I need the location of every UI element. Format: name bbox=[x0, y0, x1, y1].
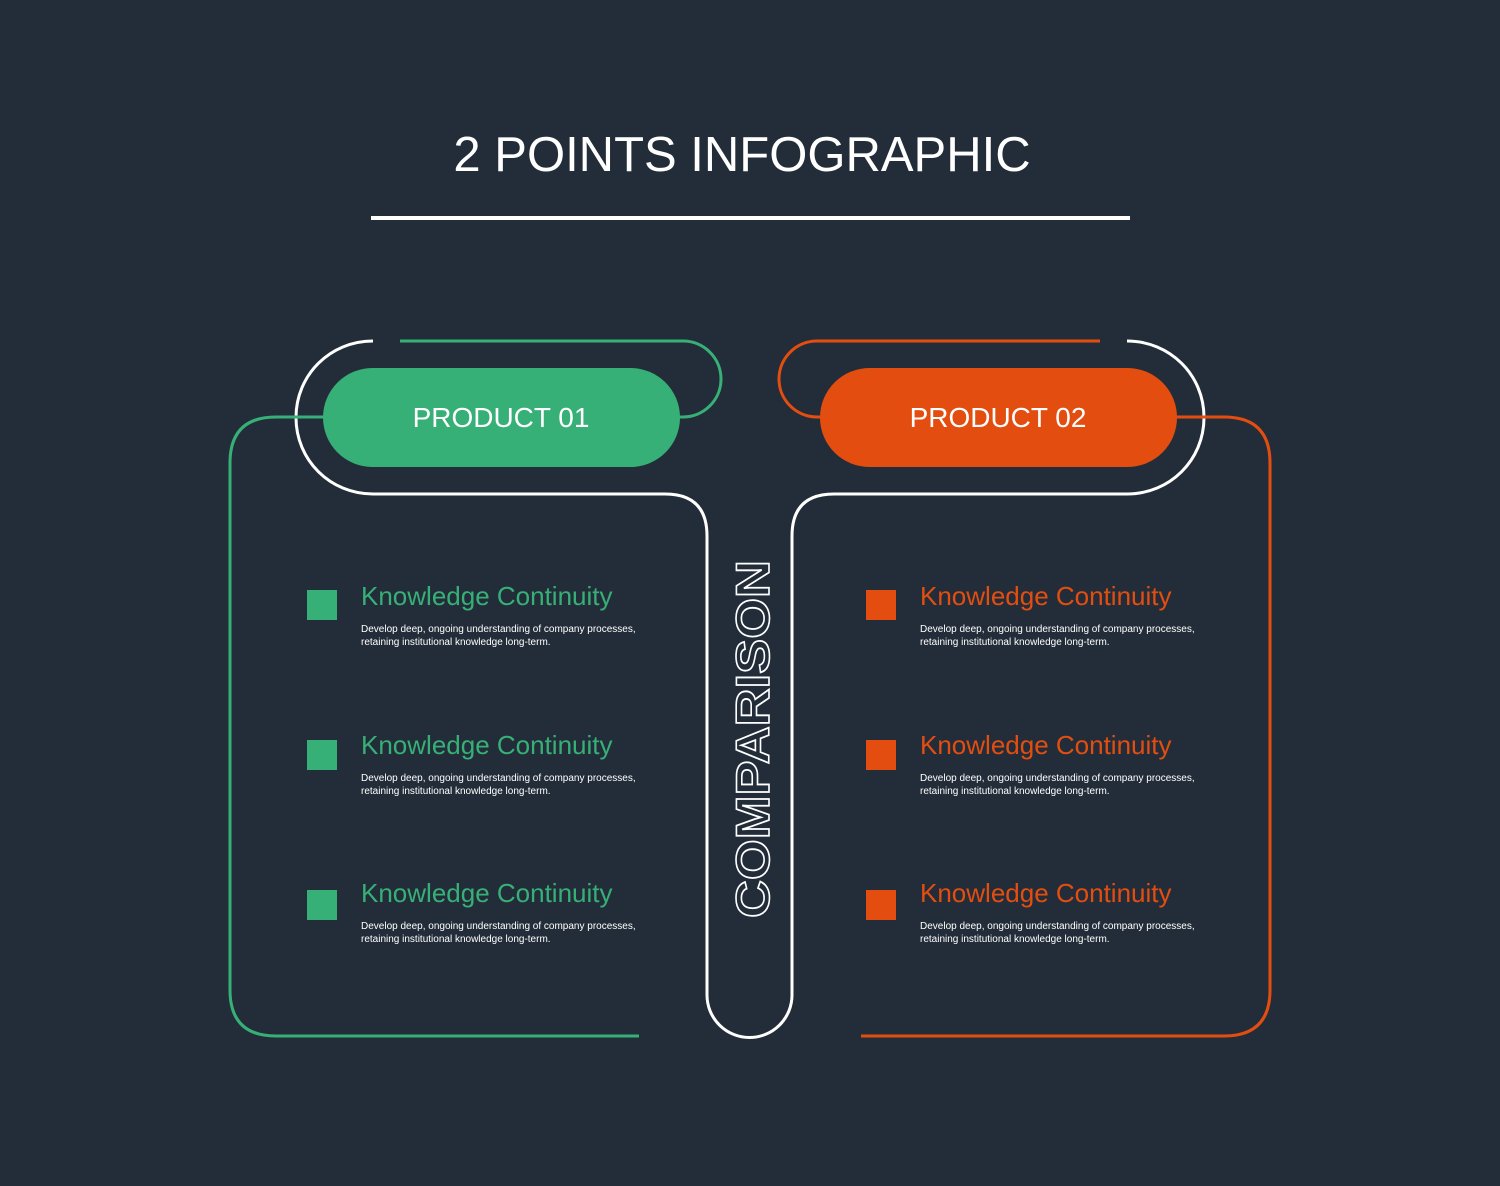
item: product 01 point 3: retaining institutional knowledge long-term. bbox=[361, 934, 551, 945]
item: product 01 point 1: retaining institutional knowledge long-term. bbox=[361, 637, 551, 648]
item: product 01 point 2: Develop deep, ongoing understanding of company processes, bbox=[361, 773, 636, 784]
item: product 02 point 3: Knowledge Continuity bbox=[920, 878, 1172, 908]
pill: product 01: PRODUCT 01 bbox=[413, 402, 589, 433]
item: product 01 point 3 bbox=[307, 878, 636, 945]
item: product 02 point 1: Develop deep, ongoing understanding of company processes, bbox=[920, 624, 1195, 635]
item: product 02 point 1 bbox=[866, 581, 1195, 648]
item: product 01 point 3: Knowledge Continuity bbox=[361, 878, 612, 908]
item: product 01 point 1: Knowledge Continuity bbox=[361, 581, 612, 611]
pill: product 01 bbox=[323, 368, 680, 467]
item: product 01 point 2 bbox=[307, 730, 636, 797]
item: product 01 point 2: Knowledge Continuity bbox=[361, 730, 612, 760]
item: product 02 point 2: Knowledge Continuity bbox=[920, 730, 1172, 760]
item: product 02 point 2: retaining institutional knowledge long-term. bbox=[920, 786, 1110, 797]
pill: product 02: PRODUCT 02 bbox=[910, 402, 1086, 433]
item: product 02 point 1: Knowledge Continuity bbox=[920, 581, 1172, 611]
panel: product 02 outline bbox=[779, 341, 1270, 1036]
item: product 02 point 3 bbox=[866, 878, 1195, 945]
pill: product 02 bbox=[820, 368, 1177, 467]
item: product 02 point 3: retaining institutional knowledge long-term. bbox=[920, 934, 1110, 945]
panel: product 01 outline bbox=[230, 341, 721, 1036]
vertical label: comparison: COMPARISON bbox=[726, 560, 779, 918]
item: product 02 point 2 bbox=[866, 730, 1195, 797]
item: product 02 point 1: retaining institutional knowledge long-term. bbox=[920, 637, 1110, 648]
white central outline bbox=[296, 341, 1204, 1038]
item: product 02 point 2: Develop deep, ongoing understanding of company processes, bbox=[920, 773, 1195, 784]
title: 2 POINTS INFOGRAPHIC bbox=[453, 128, 1031, 182]
item: product 02 point 3: Develop deep, ongoing understanding of company processes, bbox=[920, 921, 1195, 932]
item: product 01 point 1 bbox=[307, 581, 636, 648]
item: product 01 point 1: Develop deep, ongoing understanding of company processes, bbox=[361, 624, 636, 635]
title bbox=[371, 128, 1130, 220]
item: product 01 point 2: retaining institutional knowledge long-term. bbox=[361, 786, 551, 797]
item: product 01 point 3: Develop deep, ongoing understanding of company processes, bbox=[361, 921, 636, 932]
